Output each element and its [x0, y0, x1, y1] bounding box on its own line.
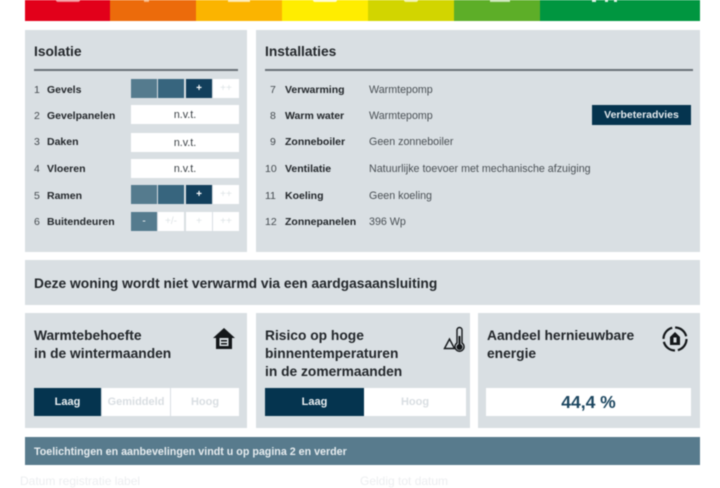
- level scale: Gemiddeld: [108, 396, 164, 408]
- row 1: gevels: [34, 78, 240, 99]
- panel: installaties: [256, 30, 700, 252]
- button: verbeteradvies: Verbeteradvies: [604, 109, 679, 121]
- banner: aardgas: [25, 260, 700, 305]
- level scale: Hoog: [191, 396, 219, 408]
- panel: risico binnentemperaturen: [256, 313, 470, 428]
- heading: risico: Risico op hoge: [265, 328, 364, 343]
- row 12: zonnepanelen: Zonnepanelen: [285, 216, 356, 228]
- heading: installaties: Installaties: [265, 44, 336, 59]
- row 4: vloeren: Vloeren: [47, 163, 86, 175]
- row 1: gevels: ++: [220, 83, 232, 94]
- row 7: verwarming: [270, 84, 433, 96]
- row 6: buitendeuren: 6: [34, 216, 40, 228]
- row 11: koeling: [265, 190, 432, 202]
- row 2: gevelpanelen: n.v.t.: [174, 109, 196, 121]
- heading: aandeel: [486, 328, 634, 362]
- heading: warmtebehoefte: Warmtebehoefte: [34, 328, 142, 343]
- row 1: gevels: 1: [34, 84, 40, 96]
- row 6: buitendeuren: -: [142, 216, 146, 227]
- heading: warmtebehoefte: in de wintermaanden: [34, 346, 171, 361]
- row 8: warm water: [270, 104, 692, 126]
- row 11: koeling: Geen koeling: [369, 190, 432, 202]
- row 4: vloeren: n.v.t.: [174, 163, 196, 175]
- button: verbeteradvies: [592, 105, 691, 125]
- row 5: ramen: 5: [34, 190, 40, 202]
- row 8: warm water: 8: [270, 110, 276, 122]
- row 6: buitendeuren: +: [196, 216, 202, 227]
- row 3: daken: 3: [34, 136, 40, 148]
- icon: thermometer warning: [442, 326, 466, 353]
- row 1: gevels: Gevels: [47, 84, 81, 96]
- row 12: zonnepanelen: [265, 216, 406, 228]
- row 4: vloeren: 4: [34, 163, 40, 175]
- icon: renewable cycle: [662, 326, 688, 352]
- row 10: ventilatie: Natuurlijke toevoer met mechanische afzuiging: [369, 163, 591, 175]
- row 11: koeling: Koeling: [285, 190, 324, 202]
- row 12: zonnepanelen: 396 Wp: [369, 216, 406, 228]
- value: 44,4 %: 44,4 %: [561, 392, 616, 412]
- row 9: zonneboiler: 9: [270, 136, 276, 148]
- panel: warmtebehoefte: [25, 313, 247, 428]
- row 6: buitendeuren: Buitendeuren: [47, 216, 115, 228]
- row 10: ventilatie: [265, 163, 591, 176]
- row 9: zonneboiler: Geen zonneboiler: [369, 136, 453, 148]
- row 10: ventilatie: Ventilatie: [285, 163, 331, 175]
- icon: house: [212, 328, 236, 350]
- heading: risico: [265, 328, 402, 379]
- faint cut-off text right: Geldig tot datum: [360, 474, 448, 488]
- panel: isolatie: [25, 30, 247, 252]
- row 4: vloeren: [34, 158, 240, 178]
- level scale: [33, 387, 240, 417]
- row 12: zonnepanelen: 12: [265, 216, 277, 228]
- row 9: zonneboiler: Zonneboiler: [285, 136, 345, 148]
- heading: isolatie: Isolatie: [34, 44, 82, 59]
- level scale: Laag: [302, 396, 327, 408]
- row 6: buitendeuren: +/-: [165, 216, 177, 227]
- level scale: Hoog: [401, 396, 429, 408]
- row 5: ramen: ++: [220, 189, 232, 200]
- row 3: daken: [34, 132, 240, 152]
- row 3: daken: Daken: [47, 136, 79, 148]
- row 10: ventilatie: 10: [265, 163, 277, 175]
- energy label colour band: [24, 0, 701, 22]
- level scale: Laag: [55, 396, 80, 408]
- row 5: ramen: +: [196, 189, 202, 200]
- row 1: gevels: +: [196, 83, 202, 94]
- row 11: koeling: 11: [265, 190, 276, 202]
- row 3: daken: n.v.t.: [174, 137, 196, 149]
- row 5: ramen: [34, 184, 240, 205]
- heading: aandeel: Aandeel hernieuwbare: [487, 328, 634, 343]
- row 2: gevelpanelen: 2: [34, 110, 40, 122]
- row 5: ramen: Ramen: [47, 190, 82, 202]
- value: 44,4 %: [486, 388, 691, 416]
- footer bar: Toelichtingen en aanbevelingen vindt u op pagina 2 en verder: [34, 446, 347, 458]
- footer bar: [25, 437, 700, 465]
- row 7: verwarming: Warmtepomp: [369, 84, 433, 96]
- faint cut-off text left: Datum registratie label: [20, 474, 140, 488]
- row 6: buitendeuren: [34, 211, 240, 232]
- panel: hernieuwbare energie: [478, 313, 700, 428]
- row 6: buitendeuren: ++: [220, 216, 232, 227]
- heading: risico: in de zomermaanden: [265, 364, 402, 379]
- row 7: verwarming: Verwarming: [285, 84, 345, 96]
- banner: aardgas: Deze woning wordt niet verwarmd via een aardgasaansluiting: [34, 276, 437, 291]
- row 8: warm water: Warm water: [285, 110, 344, 122]
- level scale: [264, 387, 466, 417]
- heading: risico: binnentemperaturen: [265, 346, 398, 361]
- heading: warmtebehoefte: [34, 328, 172, 361]
- heading: aandeel: energie: [487, 346, 536, 361]
- row 9: zonneboiler: [270, 136, 454, 148]
- row 8: warm water: Warmtepomp: [369, 110, 433, 122]
- row 2: gevelpanelen: [34, 104, 240, 124]
- row 7: verwarming: 7: [270, 84, 276, 96]
- row 2: gevelpanelen: Gevelpanelen: [47, 110, 115, 122]
